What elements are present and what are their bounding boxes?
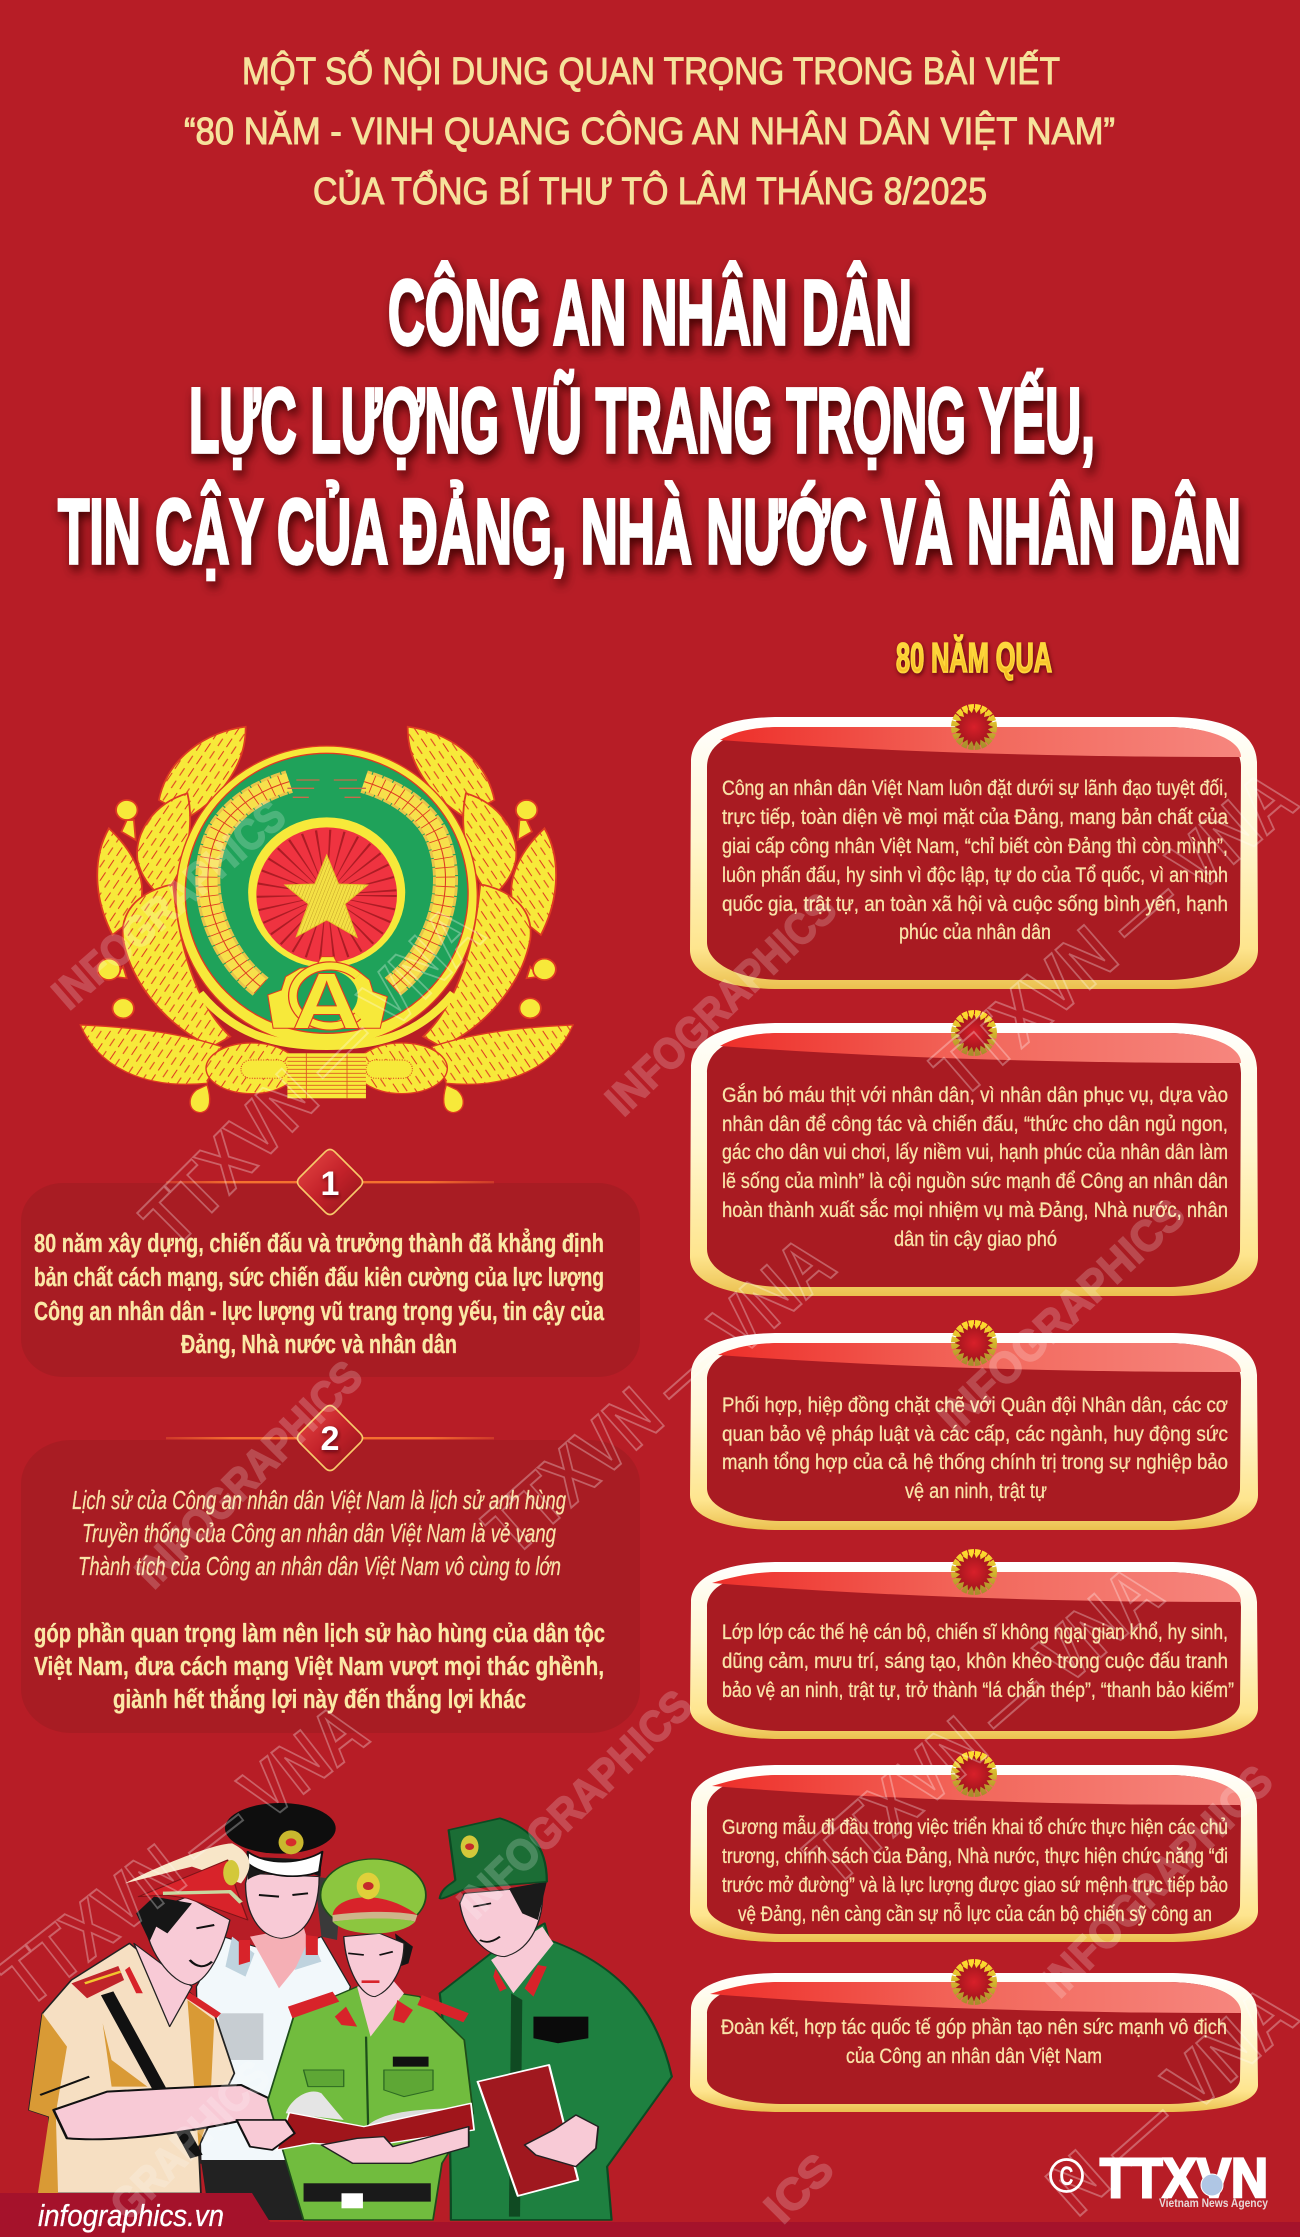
- panel 2 bold text: [34, 1620, 605, 1714]
- panel 1 background: [21, 1183, 640, 1377]
- panel 2 bold text: Việt Nam, đưa cách mạng Việt Nam vượt mọi thác ghềnh,: [34, 1653, 604, 1681]
- card 6: Đoàn kết, hợp tác quốc tế góp phần tạo nên sức mạnh vô địch: [721, 2015, 1227, 2039]
- subtitle: CỦA TỔNG BÍ THƯ TÔ LÂM THÁNG 8/2025: [313, 168, 987, 213]
- card 6: của Công an nhân dân Việt Nam: [846, 2044, 1102, 2068]
- card 5: [690, 1754, 1258, 1942]
- emblem: wheat right: [334, 780, 446, 987]
- copyright mark: [1050, 2160, 1082, 2192]
- card 3: mạnh tổng hợp của cả hệ thống chính trị trong sự nghiệp bảo: [722, 1450, 1228, 1474]
- emblem: gear and letters: A: [292, 956, 361, 1046]
- panel 1 text: bản chất cách mạng, sức chiến đấu kiên cường của lực lượng: [34, 1264, 604, 1292]
- panel 2 number diamond: 2: [321, 1420, 339, 1458]
- logo: TTXVN: TTXVN: [1100, 2146, 1268, 2209]
- panel 2 italic text: [72, 1485, 566, 1581]
- officer in white uniform: [196, 1803, 350, 2220]
- panel 2 italic text: Truyền thống của Công an nhân dân Việt Nam là vẻ vang: [82, 1518, 556, 1548]
- watermark: TTXVN - VNA: TTXVN — VNA: [126, 889, 500, 1263]
- emblem: lower leaves right: [356, 1025, 573, 1113]
- illustration: four officers: [29, 1803, 672, 2220]
- panel 2 italic text: Lịch sử của Công an nhân dân Việt Nam là lịch sử anh hùng: [72, 1485, 566, 1515]
- panel 1 number diamond: 1: [321, 1165, 339, 1203]
- card 1: [690, 706, 1258, 989]
- emblem: lower leaves left: [80, 1025, 297, 1113]
- panel 2 bold text: góp phần quan trọng làm nên lịch sử hào hùng của dân tộc: [34, 1620, 605, 1648]
- officer in dark green uniform: [440, 1818, 672, 2220]
- panel 2 italic text: Thành tích của Công an nhân dân Việt Nam vô cùng to lớn: [78, 1551, 561, 1581]
- watermark: INFOGRAPHICS: GRAPHICS: [101, 2051, 279, 2230]
- card 3: [690, 1322, 1258, 1530]
- emblem: coin stack: [287, 1053, 366, 1098]
- heading: 80 NĂM QUA: 80 NĂM QUA: [896, 634, 1052, 681]
- panel 1 text: Đảng, Nhà nước và nhân dân: [181, 1331, 457, 1359]
- watermark: INFOGRAPHICS: INFOGRAPHICS: [1032, 1756, 1282, 2007]
- emblem: wheat left: [208, 780, 320, 987]
- card 2: dân tin cậy giao phó: [894, 1227, 1057, 1251]
- card 1: quốc gia, trật tự, an toàn xã hội và cuộc sống bình yên, hạnh: [722, 892, 1228, 916]
- logo: TTXVN: Vietnam News Agency: [1159, 2196, 1268, 2210]
- emblem: upper leaves left: [97, 727, 246, 1047]
- emblem: upper leaves right: [408, 727, 556, 1047]
- card 3: Phối hợp, hiệp đồng chặt chẽ với Quân đội Nhân dân, các cơ: [722, 1393, 1228, 1417]
- emblem: ring lower edge: [200, 993, 453, 1046]
- card 4: dũng cảm, mưu trí, sáng tạo, khôn khéo trong cuộc đấu tranh: [722, 1649, 1228, 1673]
- emblem: [80, 727, 573, 1113]
- watermark: INFOGRAPHICS: INFOGRAPHICS: [596, 884, 846, 1125]
- traffic officer: [29, 1843, 286, 2193]
- panel 1 text: [34, 1227, 605, 1359]
- emblem: outer ring: [176, 746, 477, 1046]
- panel 1 rule: [166, 1181, 494, 1183]
- panel: point 1: [21, 1150, 640, 1377]
- emblem: gear and letters: [268, 956, 387, 1046]
- emblem: green ring: [185, 753, 468, 1033]
- emblem: sun disc: [248, 817, 405, 968]
- watermark: TTXVN - VNA: [0, 754, 1300, 2231]
- emblem: red disc with rays: [256, 827, 397, 963]
- watermark: INFOGRAPHICS: INFOGRAPHICS: [43, 791, 295, 1019]
- site label: infographics.vn: [38, 2198, 224, 2233]
- watermark: INFOGRAPHICS: INFOGRAPHICS: [448, 1681, 702, 1928]
- subtitle: MỘT SỐ NỘI DUNG QUAN TRỌNG TRONG BÀI VIẾT: [242, 48, 1060, 93]
- panel 1 text: Công an nhân dân - lực lượng vũ trang trọng yếu, tin cậy của: [34, 1298, 605, 1326]
- card 3: vệ an ninh, trật tự: [905, 1479, 1047, 1503]
- panel 2 background: [21, 1440, 640, 1733]
- footer band: [0, 2193, 1300, 2237]
- subtitle: “80 NĂM - VINH QUANG CÔNG AN NHÂN DÂN VIỆT NAM”: [184, 109, 1115, 153]
- panel 1 text: 80 năm xây dựng, chiến đấu và trưởng thành đã khẳng định: [34, 1227, 604, 1258]
- card 1: phúc của nhân dân: [899, 920, 1051, 944]
- watermark: TTXVN - VNA: TTXVN — VNA: [469, 1220, 850, 1571]
- panel 1 number diamond: [298, 1150, 362, 1214]
- card 2: nhân dân để công tác và chiến đấu, “thức cho dân ngủ ngon,: [722, 1112, 1228, 1136]
- subtitle: [184, 48, 1115, 213]
- card 2: [690, 1012, 1258, 1296]
- watermark: TTXVN - VNA: TTXVN — VNA: [790, 1549, 1178, 1902]
- title: [58, 261, 1241, 583]
- panel 2 number diamond: [298, 1406, 362, 1470]
- copyright mark: C: [1060, 2161, 1074, 2191]
- emblem: star: [285, 855, 368, 937]
- panel 2 bold text: giành hết thắng lợi này đến thắng lợi khác: [113, 1684, 526, 1714]
- card 4: [690, 1552, 1258, 1739]
- watermark: INFOGRAPHICS: ICS: [755, 2144, 843, 2233]
- card 6: [690, 1962, 1258, 2112]
- card 2: Gắn bó máu thịt với nhân dân, vì nhân dân phục vụ, dựa vào: [722, 1082, 1228, 1107]
- card 1: trực tiếp, toàn diện về mọi mặt của Đảng, mang bản chất của: [722, 805, 1228, 829]
- watermark: INFOGRAPHICS: INFOGRAPHICS: [929, 1190, 1195, 1442]
- officer in light green uniform: [268, 1859, 474, 2220]
- card 2: hoàn thành xuất sắc mọi nhiệm vụ mà Đảng, Nhà nước, nhân: [722, 1197, 1228, 1222]
- watermark: INFOGRAPHICS: [43, 791, 1282, 2233]
- panel 2 rule: [166, 1437, 494, 1439]
- watermark: INFOGRAPHICS: INFOGRAPHICS: [126, 1352, 372, 1598]
- pointing hand: [237, 2120, 295, 2150]
- panel: point 2: [21, 1406, 640, 1733]
- card 3: quan bảo vệ pháp luật và các cấp, các ngành, huy động sức: [722, 1422, 1228, 1446]
